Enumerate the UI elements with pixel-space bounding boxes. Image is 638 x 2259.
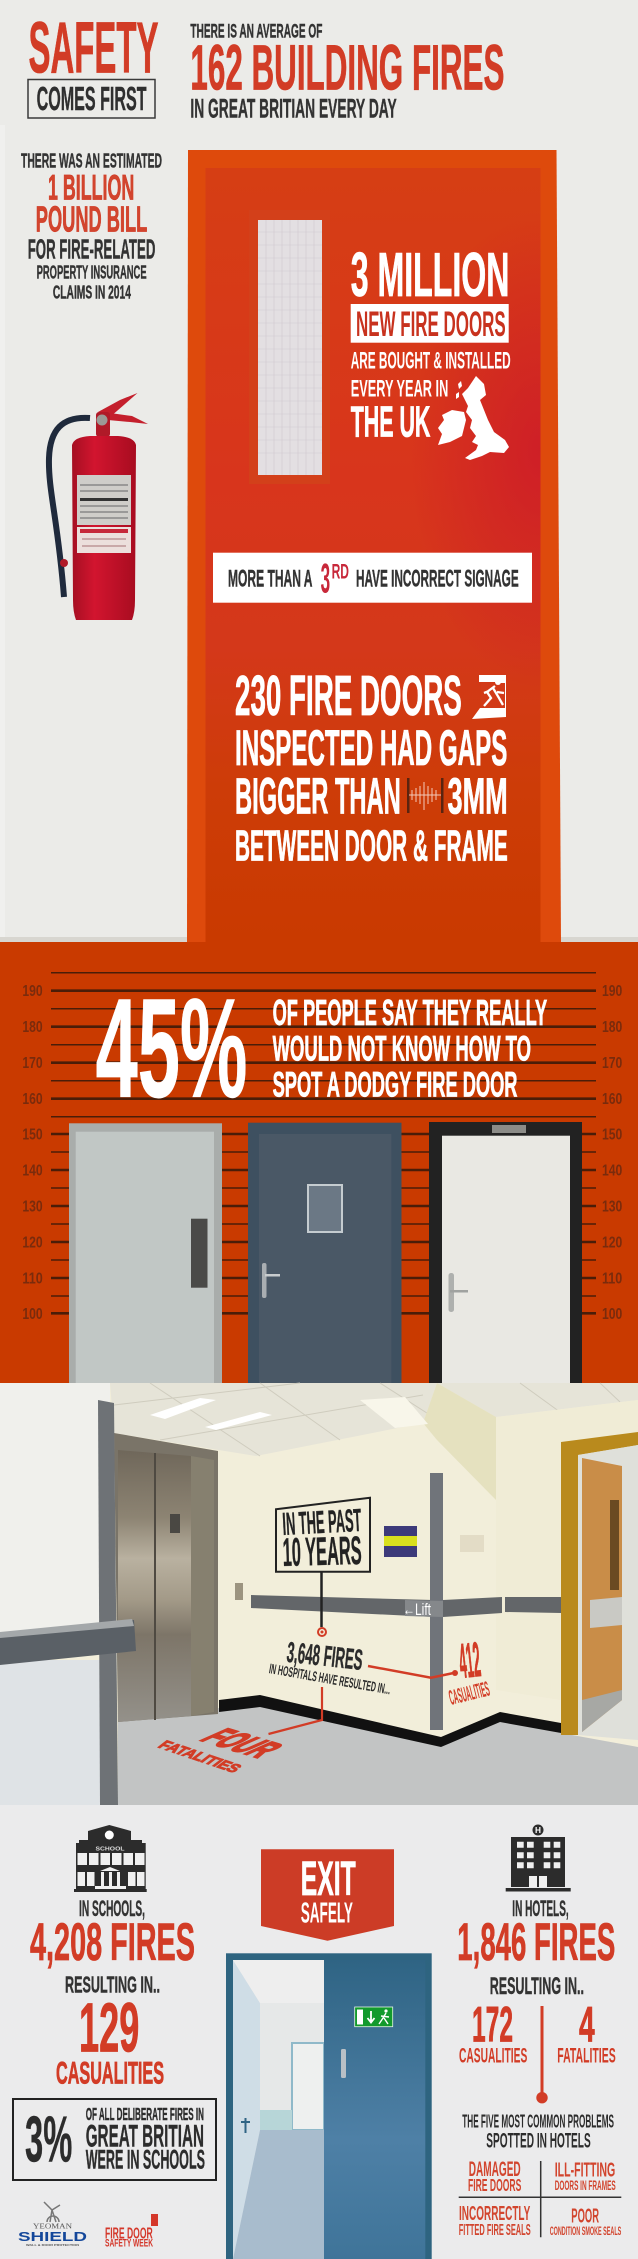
height labels right: 160	[602, 1091, 622, 1108]
statistic: 412 casualties	[447, 1633, 492, 1710]
text: FATALITIES	[154, 1738, 246, 1775]
ceiling lights	[150, 1398, 272, 1430]
sign: incorrect signage: MORE THAN A	[228, 566, 312, 593]
sign: incorrect signage: 3	[321, 555, 330, 602]
callout: 3% of deliberate fires: GREAT BRITIAN	[86, 2118, 204, 2154]
left wall	[0, 1383, 136, 1805]
lift button	[235, 1583, 243, 1600]
problem: incorrectly fitted seals	[459, 2203, 531, 2239]
height labels left	[22, 983, 43, 1323]
text block: schools statistics: RESULTING IN..	[65, 1972, 160, 1998]
banner: exit safely: EXIT	[301, 1852, 356, 1906]
text block: 162 building fires	[190, 20, 504, 123]
lift	[114, 1433, 218, 1722]
panel: height chart	[0, 942, 638, 1384]
callout: 3% of deliberate fires: WERE IN SCHOOLS	[86, 2144, 205, 2174]
panel: hospital corridor photo: CASUALITIES	[447, 1678, 492, 1710]
problem: ill-fitting doors	[555, 2160, 616, 2193]
height labels left: 190	[22, 983, 43, 1000]
door leaf	[324, 1960, 425, 2259]
problems grid: INCORRECTLY	[459, 2203, 531, 2225]
text block: hotels statistics: CASUALITIES	[459, 2043, 527, 2067]
door frame	[187, 150, 561, 942]
problems grid: FITTED FIRE SEALS	[459, 2222, 531, 2239]
icon: exit runner	[472, 675, 506, 719]
logo: Yeoman Shield: YEOMAN	[33, 2222, 73, 2230]
wooden door	[561, 1432, 638, 1740]
text block: 3 million new fire doors: EVERY YEAR IN	[351, 376, 448, 403]
connector: casualties	[368, 1666, 458, 1678]
height labels left: 160	[22, 1091, 43, 1108]
logo: Fire Door Safety Week: FIRE DOOR	[105, 2225, 153, 2242]
height labels left: 100	[22, 1306, 43, 1323]
icon: school building: SCHOOL	[96, 1846, 125, 1852]
sign: incorrect signage: RD	[332, 560, 349, 583]
banner: exit safely: SAFELY	[301, 1898, 353, 1930]
text block: schools statistics: CASUALITIES	[56, 2054, 164, 2090]
text: SAFETY	[28, 8, 158, 89]
problem: poor smoke seals	[550, 2206, 621, 2238]
icon: target marker	[317, 1627, 327, 1637]
logo: Fire Door Safety Week: SAFETY WEEK	[105, 2238, 153, 2250]
photo: exit door	[226, 1953, 432, 2259]
logo: Yeoman Shield: WALL & DOOR PROTECTION	[26, 2243, 79, 2247]
floor	[118, 1703, 638, 1805]
text block: 1 billion pound bill: 1 BILLION	[48, 167, 134, 207]
lift sign: ←Lift	[403, 1600, 431, 1619]
text block: hotels statistics	[457, 1896, 616, 2067]
text block: schools statistics: IN SCHOOLS,	[79, 1896, 145, 1921]
height labels right: 100	[602, 1306, 622, 1323]
text block: hotels statistics: IN HOTELS,	[512, 1896, 569, 1921]
text block: 3 million new fire doors: THE UK	[351, 399, 431, 447]
height lines	[51, 973, 596, 1313]
icon: hotel building: H	[535, 1826, 541, 1835]
door handle	[341, 2049, 346, 2078]
text block: hotels statistics: 4	[579, 1997, 595, 2053]
height labels right: 170	[602, 1055, 622, 1072]
connector: fatalities	[268, 1687, 322, 1734]
text block: schools statistics	[30, 1896, 195, 2090]
text block: 162 building fires: IN GREAT BRITIAN EVERY DAY	[190, 93, 397, 123]
callout: 3% of deliberate fires: OF ALL DELIBERATE FIRES IN	[86, 2104, 204, 2124]
height labels right: 180	[602, 1019, 622, 1036]
height labels left: 110	[22, 1270, 43, 1288]
heading: safety comes first: COMES FIRST	[37, 80, 147, 117]
height labels left: 130	[22, 1198, 43, 1216]
height labels right: 110	[602, 1270, 622, 1288]
text block: schools statistics: 4,208 FIRES	[30, 1913, 195, 1972]
height labels left: 180	[22, 1019, 43, 1036]
problem: poor smoke seals: POOR	[571, 2206, 599, 2228]
callout: 3% of deliberate fires	[13, 2099, 216, 2180]
text block: 3,648 fires in hospitals	[268, 1637, 392, 1697]
sign: incorrect signage	[213, 553, 532, 603]
height labels right	[602, 983, 622, 1323]
panel: hospital corridor photo: 412	[457, 1633, 483, 1689]
text block: 230 fire doors had gaps: 3MM	[448, 767, 508, 824]
icon: fire extinguisher	[49, 393, 148, 620]
panel: schools and hotels	[0, 1805, 638, 2259]
callout: in the past 10 years	[276, 1498, 370, 1575]
text block: 1 billion pound bill: FOR FIRE-RELATED	[28, 233, 155, 264]
callout: 3% of deliberate fires: 3%	[25, 2103, 72, 2176]
height labels right: 150	[602, 1126, 622, 1144]
text block: schools statistics: 129	[79, 1989, 139, 2067]
text block: 3,648 fires in hospitals: IN HOSPITALS HAVE RESULTED IN...	[268, 1660, 392, 1697]
icon: map of the UK	[438, 376, 509, 460]
problems grid: FIRE DOORS	[468, 2175, 521, 2195]
connector line	[320, 1572, 323, 1627]
text block: 3,648 fires in hospitals: 3,648 FIRES	[285, 1637, 364, 1677]
panel: hospital corridor photo	[0, 1383, 638, 1805]
statistic: 45%: 45%	[96, 969, 247, 1127]
door: white	[429, 1122, 582, 1384]
height labels left: 120	[22, 1234, 43, 1252]
text block: 1 billion pound bill	[21, 151, 162, 302]
panel: wall and fire door	[0, 0, 638, 942]
text block: hotels statistics: 172	[472, 1997, 513, 2053]
height labels right: 140	[602, 1162, 622, 1180]
problems grid: DAMAGED	[469, 2158, 521, 2181]
text block: 3 million new fire doors	[351, 241, 511, 447]
height labels right: 120	[602, 1234, 622, 1252]
logo: Fire Door Safety Week	[105, 2214, 158, 2250]
height labels left: 140	[22, 1162, 43, 1180]
height labels right: 130	[602, 1198, 622, 1216]
problem: damaged fire doors	[468, 2158, 521, 2195]
icon: 3mm gap gauge	[407, 778, 444, 813]
icon: hotel building	[506, 1824, 571, 1892]
panel: hospital corridor photo: FOUR	[190, 1725, 293, 1762]
door leaf	[206, 168, 540, 942]
wayfinding sign	[384, 1526, 417, 1557]
statistic: four fatalities	[154, 1725, 293, 1775]
text block: dodgy fire door	[273, 992, 547, 1105]
height labels left: 150	[22, 1126, 43, 1144]
text block: 1 billion pound bill: THERE WAS AN ESTIMATED	[21, 151, 162, 173]
panel: hospital corridor photo: 10 YEARS	[282, 1529, 362, 1575]
exit sign	[355, 2007, 393, 2027]
handrail	[251, 1473, 561, 1730]
panel: hospital corridor photo: IN THE PAST	[281, 1502, 362, 1542]
problems grid	[459, 2158, 621, 2239]
icon: school building	[74, 1825, 147, 1892]
text block: 162 building fires: THERE IS AN AVERAGE OF	[190, 20, 322, 42]
text block: 230 fire doors had gaps	[235, 665, 508, 871]
ceiling	[110, 1383, 638, 1456]
text block: 1 billion pound bill: POUND BILL	[36, 199, 147, 240]
logo: Yeoman Shield: SHIELD	[18, 2229, 87, 2244]
light switch	[460, 1535, 484, 1552]
height labels left: 170	[22, 1055, 43, 1072]
banner: exit safely	[261, 1849, 394, 1941]
door window	[249, 210, 330, 484]
connector: stem with dot	[536, 2006, 548, 2103]
text block: five common problems	[462, 2111, 614, 2152]
door: navy	[248, 1123, 402, 1384]
logo: Yeoman Shield	[18, 2202, 87, 2247]
door: grey	[69, 1123, 222, 1384]
height labels right: 190	[602, 983, 622, 1000]
heading: safety comes first	[28, 8, 158, 118]
skirting	[219, 1695, 561, 1747]
text block: 1 billion pound bill: CLAIMS IN 2014	[53, 282, 131, 302]
text block: 1 billion pound bill: PROPERTY INSURANCE	[37, 262, 147, 283]
text block: 230 fire doors had gaps: BIGGER THAN	[235, 767, 401, 824]
